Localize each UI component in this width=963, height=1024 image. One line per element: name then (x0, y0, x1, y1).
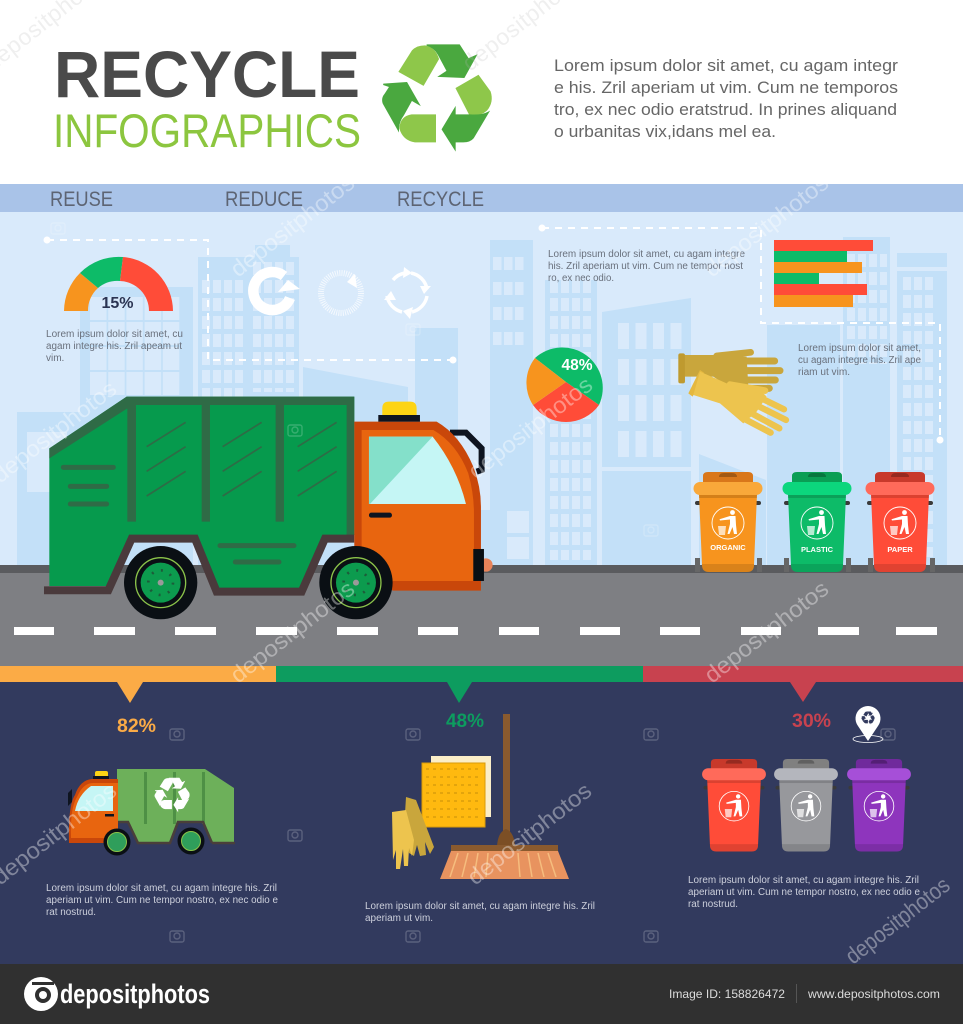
icon: dotted circular arrow (321, 273, 361, 313)
text block: gauge note: vim. (46, 353, 64, 364)
watermark overlay: depositphotos (463, 371, 597, 484)
watermark overlay: depositphotos (462, 777, 596, 890)
stat: 30%: 30% (792, 710, 831, 732)
text block: middle note: Lorem ipsum dolor sit amet, cu agam integre (548, 249, 745, 260)
icon: four arrows circle (384, 267, 431, 319)
chart: pie 48% (526, 347, 603, 422)
intro text block: e his. Zril aperiam ut vim. Cum ne temporos (554, 78, 898, 97)
lower bin: red (702, 759, 766, 852)
panel: city scene background (0, 212, 963, 566)
bin: paper (866, 472, 935, 572)
title: INFOGRAPHICS (53, 104, 361, 157)
text block: truck note (46, 883, 278, 918)
watermark overlay: depositphotos (699, 575, 833, 688)
text block: middle note: ro, ex nec odio. (548, 273, 614, 284)
chart: gauge 15% (64, 257, 173, 312)
truck body (44, 397, 354, 592)
text block: gauge note (46, 329, 183, 364)
dashed connector left (44, 236, 456, 364)
footer image id and url: Image ID: 158826472 (669, 987, 785, 1001)
chart: gauge 15%: 15% (101, 295, 134, 312)
text block: bins note: Lorem ipsum dolor sit amet, cu agam integre his. Zril (688, 875, 919, 886)
intro text block: tro, ex nec odio eratstrud. In prines aliquand (554, 100, 897, 119)
text block: tools note: Lorem ipsum dolor sit amet, cu agam integre his. Zril (365, 901, 595, 912)
stat: 48%: 48% (446, 711, 484, 732)
footer bar (0, 964, 963, 1024)
chart: pie 48%: 48% (561, 357, 593, 374)
icon: green recycle logo (383, 45, 491, 149)
intro text block (554, 56, 898, 141)
text block: truck note: Lorem ipsum dolor sit amet, cu agam integre his. Zril (46, 883, 277, 894)
lower bin: purple (847, 759, 911, 852)
panel: lower stats background (0, 682, 963, 964)
text block: right note: Lorem ipsum dolor sit amet, (798, 343, 921, 354)
small recycling truck (68, 769, 235, 856)
cleaning tools: sponge, gloves, broom (392, 714, 569, 879)
watermark overlay: depositphotos (225, 169, 359, 282)
text block: tools note (365, 901, 595, 924)
footer logo (24, 977, 210, 1011)
text block: truck note: aperiam ut vim. Cum ne tempor nostro, ex nec odio e (46, 895, 278, 906)
bin: organic (694, 472, 762, 572)
top category band: REDUCE (225, 188, 303, 211)
truck cab (354, 402, 493, 591)
coloured divider bars with pointers (0, 666, 963, 703)
text block: bins note: rat nostrud. (688, 899, 738, 910)
text block: middle note (548, 249, 745, 284)
text block: right note: cu agam integre his. Zril ape (798, 355, 921, 366)
bin: organic: ORGANIC (710, 543, 746, 552)
stat: 82%: 82% (117, 715, 156, 737)
title: RECYCLE (54, 37, 360, 111)
footer image id and url (669, 984, 940, 1003)
text block: gauge note: Lorem ipsum dolor sit amet, cu (46, 329, 183, 340)
text block: right note (798, 343, 921, 378)
text block: right note: riam ut vim. (798, 367, 850, 378)
rear wheel (124, 546, 197, 619)
front wheel (319, 546, 393, 619)
intro text block: Lorem ipsum dolor sit amet, cu agam integr (554, 56, 898, 75)
bin: plastic (782, 472, 852, 572)
icon: location pin (853, 706, 883, 742)
watermark overlay: depositphotos (699, 169, 833, 282)
text block: bins note (688, 875, 920, 910)
footer logo: depositphotos (60, 979, 210, 1009)
footer image id and url: www.depositphotos.com (807, 987, 940, 1001)
bin: plastic: PLASTIC (801, 545, 834, 554)
watermark overlay: depositphotos (225, 575, 359, 688)
intro text block: o urbanitas vix,idans mel ea. (554, 122, 776, 141)
road (0, 565, 963, 666)
lower bin: grey (774, 759, 838, 852)
icon: thick circular arrow (253, 272, 300, 310)
text block: gauge note: agam integre his. Zril apeam ut (46, 341, 182, 352)
dashed connector right (538, 224, 944, 444)
top category band: REUSE (50, 188, 113, 211)
text block: tools note: aperiam ut vim. (365, 913, 433, 924)
garbage truck (44, 397, 493, 619)
text block: middle note: his. Zril aperiam ut vim. Cum ne tempor nost (548, 261, 743, 272)
top category band: RECYCLE (397, 188, 484, 211)
bin: paper: PAPER (887, 545, 913, 554)
title (53, 37, 361, 157)
icon: rubber gloves (678, 352, 786, 433)
text block: truck note: rat nostrud. (46, 907, 96, 918)
chart: horizontal bars (774, 240, 873, 307)
text block: bins note: aperiam ut vim. Cum ne tempor nostro, ex nec odio e (688, 887, 920, 898)
header background (0, 0, 963, 184)
top category band (0, 184, 963, 212)
